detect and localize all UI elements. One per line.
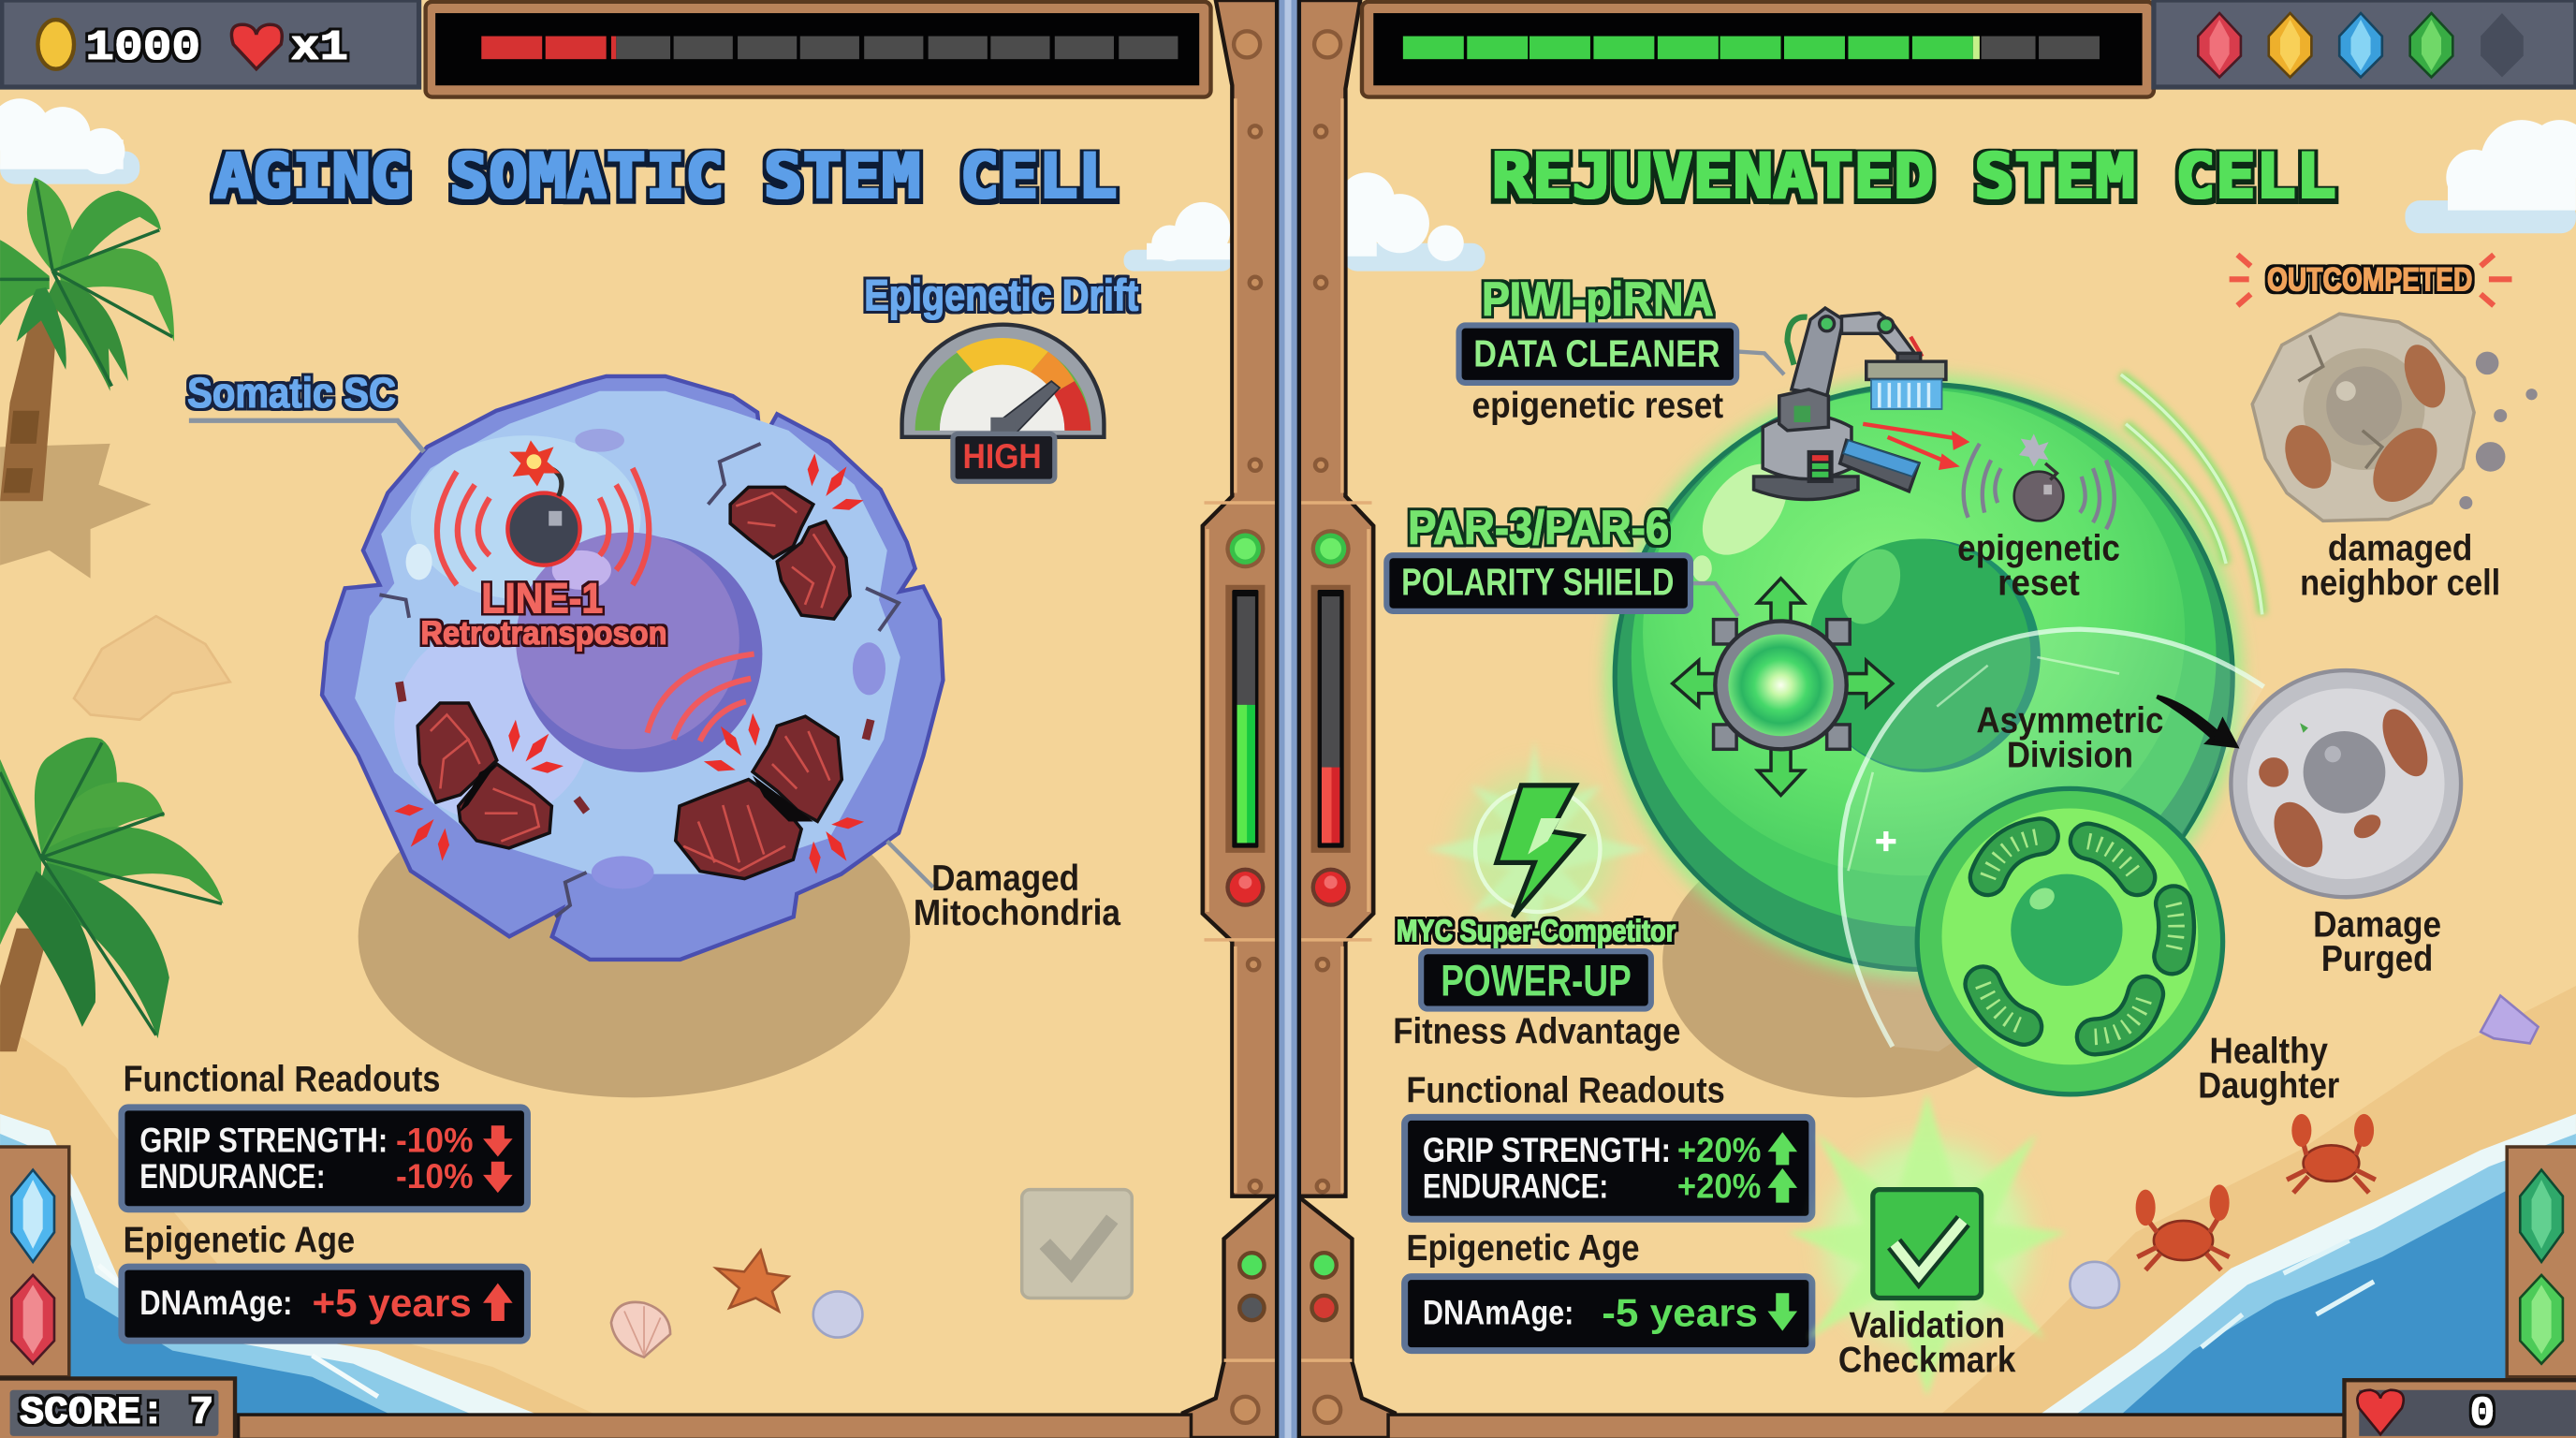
cell ground shadow — [359, 775, 910, 1097]
cloud: right panel left — [1339, 172, 1486, 271]
readout panel: DNAmAge left — [122, 1267, 527, 1341]
label: OUTCOMPETED — [2230, 255, 2511, 305]
label: Damage Purged — [2313, 904, 2441, 979]
damaged neighbor cell — [2252, 314, 2538, 521]
damaged mitochondrion: bottom right — [676, 716, 842, 879]
title: rejuvenated stem cell: REJUVENATED STEM CELL — [1492, 142, 2336, 213]
label panel: POWER-UP: POWER-UP — [1441, 957, 1632, 1006]
validation checkmark — [1788, 1093, 2067, 1397]
label: LINE-1 Retrotransposon — [420, 575, 667, 652]
readout panel: grip strength and endurance right: GRIP STRENGTH: — [1423, 1131, 1671, 1169]
icon: green gem — [2410, 13, 2452, 77]
gem panel: left — [0, 1147, 69, 1377]
icon: gold gem — [2269, 13, 2311, 77]
label: damaged neighbor cell — [2300, 528, 2500, 603]
HUD: coins and lives — [2, 0, 419, 87]
label: epigenetic reset: epigenetic reset — [1472, 386, 1723, 426]
damaged mitochondrion: bottom left — [417, 703, 551, 848]
label panel: POLARITY SHIELD — [1386, 555, 1738, 616]
label: LINE-1 Retrotransposon: Retrotransposon — [420, 615, 667, 652]
label: PAR-3/PAR-6: PAR-3/PAR-6 — [1408, 501, 1669, 554]
label: Damaged Mitochondria: Damaged — [931, 858, 1079, 899]
icon: round shell — [813, 1291, 862, 1338]
beach and sea: right — [1939, 986, 2576, 1438]
cloud: top left — [0, 98, 139, 184]
label panel: DATA CLEANER: DATA CLEANER — [1473, 331, 1720, 374]
palm tree: bottom — [0, 738, 224, 1051]
lives box — [2344, 1380, 2576, 1438]
label: epigenetic reset (on cell): reset — [1998, 563, 2080, 603]
label: Asymmetric Division: Asymmetric — [1976, 701, 2163, 741]
gem panel: right — [2507, 1147, 2576, 1377]
inactive checkmark — [1022, 1190, 1132, 1298]
readout panel: DNAmAge right: -5 years — [1602, 1290, 1758, 1334]
glow ring — [1605, 374, 2243, 979]
icon: purple shell — [2481, 996, 2539, 1043]
sand dune — [74, 616, 230, 720]
lives box: 0 — [2470, 1391, 2495, 1438]
healthy daughter cell — [1917, 788, 2223, 1094]
progress bar: rejuvenated — [1362, 2, 2154, 97]
rivets — [1232, 31, 1340, 1423]
icon: defused bomb — [1964, 433, 2115, 529]
label: Somatic SC — [187, 369, 424, 452]
cell ground shadow — [1662, 825, 2050, 1097]
arrow: to damage purged — [2157, 697, 2236, 746]
icon: polarity shield — [1673, 579, 1893, 795]
palm tree: top — [0, 178, 174, 579]
status lights — [1239, 1253, 1337, 1320]
readout panel: grip strength and endurance left — [122, 1108, 527, 1210]
score box — [0, 1378, 235, 1438]
label: epigenetic reset (on cell) — [1957, 528, 2120, 603]
gauge: epigenetic drift HIGH — [902, 325, 1104, 481]
beach and sea: left — [0, 1022, 600, 1438]
label: Damaged Mitochondria — [887, 842, 1120, 933]
cloud: top right — [2405, 120, 2576, 233]
label: Healthy Daughter: Daughter — [2198, 1065, 2339, 1106]
HUD: coins and lives: x1 — [291, 23, 348, 72]
panel: left, aging stem cell — [122, 271, 1138, 1357]
label: MYC Super-Competitor: MYC Super-Competitor — [1397, 915, 1676, 949]
cloud: top centre — [1123, 202, 1232, 271]
icon: starfish — [716, 1251, 788, 1312]
readout panel: grip strength and endurance left: -10% — [396, 1121, 474, 1159]
curved motion lines — [2121, 374, 2262, 614]
readout panel: DNAmAge right: DNAmAge: — [1423, 1294, 1573, 1332]
frame bottom rails — [239, 1415, 1191, 1438]
label: PIWI-piRNA: PIWI-piRNA — [1482, 272, 1714, 326]
readout panel: grip strength and endurance left: GRIP STRENGTH: — [139, 1121, 388, 1159]
label: epigenetic reset (on cell): epigenetic — [1957, 528, 2120, 568]
readout panel: DNAmAge left: DNAmAge: — [139, 1284, 292, 1322]
icon: heart — [231, 24, 282, 69]
readout panel: grip strength and endurance left: -10% — [396, 1157, 474, 1196]
healthy mitochondria — [1983, 836, 2176, 1036]
icon: MYC lightning power-up — [1426, 740, 1647, 961]
readout panel: DNAmAge left: +5 years — [313, 1281, 472, 1325]
nucleus damage arcs — [648, 654, 754, 741]
label: Healthy Daughter: Healthy — [2210, 1032, 2328, 1072]
label panel: POLARITY SHIELD: POLARITY SHIELD — [1401, 560, 1674, 603]
icon: seashell — [611, 1302, 670, 1357]
centre meter: left — [1225, 529, 1265, 907]
aging cell — [322, 376, 943, 960]
label: Damage Purged: Purged — [2321, 939, 2433, 979]
label: Validation Checkmark: Validation — [1849, 1306, 2005, 1346]
label: damaged neighbor cell: neighbor cell — [2300, 563, 2500, 603]
icon: crab upper — [2287, 1114, 2376, 1193]
icon: round shell right — [2070, 1262, 2119, 1308]
label: damaged neighbor cell: damaged — [2328, 528, 2472, 568]
label: Healthy Daughter — [2198, 1032, 2339, 1106]
label: OUTCOMPETED: OUTCOMPETED — [2267, 262, 2472, 299]
readout panel: grip strength and endurance left: ENDURANCE: — [139, 1157, 326, 1196]
HUD: coins and lives: 1000 — [85, 23, 200, 72]
icon: bomb LINE-1 — [437, 440, 649, 585]
label: Somatic SC: Somatic SC — [187, 369, 396, 417]
readout panel: grip strength and endurance right: +20% — [1677, 1167, 1761, 1205]
label: Validation Checkmark: Checkmark — [1838, 1340, 2016, 1380]
icon: coin — [37, 20, 74, 69]
icon: crab lower — [2136, 1184, 2230, 1270]
score box: SCORE: 7 — [20, 1390, 213, 1435]
heading: Functional Readouts left: Functional Readouts — [124, 1059, 440, 1099]
icon: empty gem slot — [2481, 13, 2524, 77]
bubble shell — [1840, 629, 2263, 1051]
large green cell — [1615, 385, 2232, 969]
purged cell — [2231, 670, 2461, 897]
heading: Epigenetic Age left: Epigenetic Age — [124, 1220, 355, 1260]
centre meter: right — [1311, 529, 1351, 907]
red damage sparks — [394, 453, 865, 874]
damaged mitochondrion: top right — [730, 487, 850, 619]
icon: blue gem — [2339, 13, 2382, 77]
label: Fitness Advantage: Fitness Advantage — [1393, 1011, 1680, 1051]
HUD: gem collection — [2154, 0, 2576, 87]
label: Asymmetric Division — [1976, 701, 2163, 776]
label panel: DATA CLEANER — [1459, 325, 1784, 383]
label: Epigenetic Drift: Epigenetic Drift — [864, 271, 1138, 321]
label: Validation Checkmark — [1838, 1306, 2016, 1380]
readout panel: grip strength and endurance right — [1405, 1117, 1812, 1219]
gauge: epigenetic drift HIGH: HIGH — [963, 437, 1042, 476]
readout panel: DNAmAge right — [1405, 1277, 1812, 1351]
label: Asymmetric Division: Division — [2007, 736, 2133, 776]
label: Damaged Mitochondria: Mitochondria — [914, 893, 1120, 933]
heading: Epigenetic Age right: Epigenetic Age — [1406, 1228, 1640, 1269]
heading: Functional Readouts right: Functional Readouts — [1406, 1071, 1725, 1111]
panel: right, rejuvenated stem cell — [1386, 255, 2539, 1397]
icon: heart — [2357, 1390, 2404, 1434]
progress bar: aging — [426, 2, 1211, 97]
readout panel: grip strength and endurance right: +20% — [1677, 1131, 1761, 1169]
icon: robot arm data cleaner — [1754, 308, 1969, 500]
title: aging somatic stem cell: AGING SOMATIC STEM CELL — [213, 142, 1117, 213]
icon: red gem — [2198, 13, 2241, 77]
label: LINE-1 Retrotransposon: LINE-1 — [481, 575, 603, 623]
readout panel: grip strength and endurance right: ENDURANCE: — [1423, 1167, 1608, 1205]
label: Damage Purged: Damage — [2313, 904, 2441, 945]
